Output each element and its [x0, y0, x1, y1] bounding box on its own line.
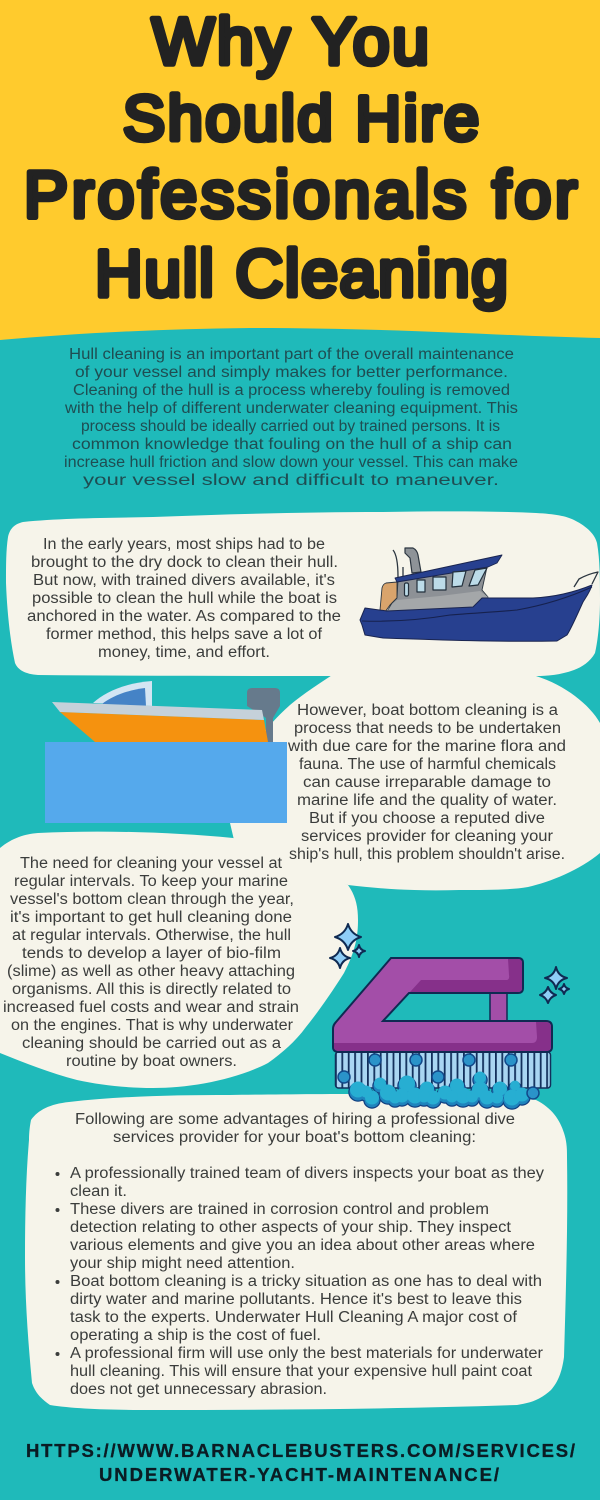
- foam shadow: [350, 1074, 529, 1108]
- list: advantages: dirty water and marine pollutants. Hence it's best to leave this: [70, 1291, 522, 1308]
- list: advantages: your ship might need attention.: [70, 1255, 295, 1272]
- title: Should Hire: [123, 84, 479, 154]
- text: regular intervals: routine by boat owners.: [66, 1053, 237, 1070]
- text: regular intervals: cleaning should be carried out as a: [22, 1035, 281, 1052]
- intro paragraph: process should be ideally carried out by trained persons. It is: [81, 418, 500, 435]
- text: early years: In the early years, most ships had to be: [43, 536, 325, 553]
- text: early years: possible to clean the hull while the boat is: [32, 590, 337, 607]
- brush post: [490, 990, 507, 1023]
- motor: [247, 688, 280, 742]
- windows: [404, 568, 487, 596]
- intro paragraph: with the help of different underwater cleaning equipment. This: [64, 400, 518, 417]
- foam outline: [350, 1074, 529, 1108]
- deck: [387, 591, 488, 612]
- icon: scrubbing brush: [333, 958, 552, 1108]
- text: regular intervals: at regular intervals. Otherwise, the hull: [12, 927, 291, 944]
- orange hull: [60, 712, 268, 742]
- source url: UNDERWATER-YACHT-MAINTENANCE/: [99, 1464, 499, 1485]
- text: regular intervals: vessel's bottom clean through the year,: [10, 891, 294, 908]
- text: boat bottom care: marine life and the quality of water.: [297, 792, 557, 809]
- list: advantages: does not get unnecessary abrasion.: [70, 1381, 327, 1398]
- funnel: [405, 548, 421, 573]
- text: regular intervals: on the engines. That is why underwater: [11, 1017, 293, 1034]
- panel: bubble 3 shape: [0, 832, 358, 1088]
- title: [24, 4, 577, 310]
- intro paragraph: common knowledge that fouling on the hull of a ship can: [72, 436, 512, 453]
- text: regular intervals: tends to develop a layer of bio-film: [22, 945, 281, 962]
- text: advantages intro: Following are some advantages of hiring a professional dive: [75, 1111, 515, 1128]
- text: boat bottom care: fauna. The use of harmful chemicals: [299, 756, 556, 773]
- text: early years: money, time, and effort.: [98, 644, 270, 661]
- title: Why You: [152, 4, 429, 78]
- windshield: [93, 681, 152, 706]
- list: advantages: A professionally trained team of divers inspects your boat as they: [70, 1165, 544, 1182]
- text: regular intervals: organisms. All this is directly related to: [12, 981, 291, 998]
- text: advantages intro: services provider for your boat's bottom cleaning:: [113, 1129, 476, 1146]
- text: boat bottom care: can cause irreparable damage to: [303, 774, 551, 791]
- list: advantages: clean it.: [70, 1183, 127, 1200]
- icon: sparkles left: [330, 924, 365, 968]
- cabin: [387, 567, 488, 612]
- list: advantages: hull cleaning. This will ensure that your expensive hull paint coat: [70, 1363, 533, 1380]
- panel: bubble 1 shape: [6, 511, 600, 676]
- text: early years: anchored in the water. As compared to the: [27, 608, 341, 625]
- intro paragraph: Hull cleaning is an important part of the overall maintenance: [69, 346, 514, 363]
- icon: sparkles right: [540, 967, 569, 1003]
- title: Professionals for: [24, 157, 577, 231]
- text: early years: [27, 536, 341, 661]
- intro paragraph: your vessel slow and difficult to maneuver.: [83, 472, 499, 489]
- icon: blue fishing boat: [360, 548, 598, 641]
- list: advantages: [56, 1165, 544, 1398]
- text: advantages intro: [75, 1111, 515, 1146]
- text: early years: former method, this helps save a lot of: [46, 626, 323, 643]
- blue water block: [45, 742, 287, 823]
- intro paragraph: of your vessel and simply makes for better performance.: [75, 364, 508, 381]
- bow rail: [574, 572, 598, 587]
- panel: advantages bubble: [25, 1094, 567, 1410]
- bristles: [336, 1052, 550, 1088]
- text: boat bottom care: process that needs to be undertaken: [294, 720, 561, 737]
- source url: [26, 1440, 575, 1485]
- gray band: [52, 702, 264, 720]
- list: advantages: A professional firm will use only the best materials for underwater: [70, 1345, 543, 1362]
- title: Hull Cleaning: [95, 236, 508, 310]
- hull line: [362, 587, 592, 621]
- roof: [395, 555, 502, 582]
- text: early years: brought to the dry dock to clean their hull.: [31, 554, 338, 571]
- source url: HTTPS://WWW.BARNACLEBUSTERS.COM/SERVICES/: [26, 1440, 575, 1461]
- text: regular intervals: The need for cleaning your vessel at: [20, 855, 283, 872]
- text: boat bottom care: However, boat bottom cleaning is a: [297, 702, 558, 719]
- text: regular intervals: [3, 855, 299, 1070]
- intro paragraph: [64, 346, 518, 489]
- list: advantages: Boat bottom cleaning is a tricky situation as one has to deal with: [70, 1273, 542, 1290]
- text: boat bottom care: But if you choose a reputed dive: [309, 810, 545, 827]
- bubbles: [338, 1054, 539, 1099]
- brush handle body: [333, 958, 552, 1052]
- list: advantages: operating a ship is the cost of fuel.: [70, 1327, 321, 1344]
- text: boat bottom care: services provider for cleaning your: [301, 828, 553, 845]
- intro paragraph: increase hull friction and slow down your vessel. This can make: [64, 454, 518, 471]
- handle shading: [334, 959, 551, 1051]
- text: boat bottom care: ship's hull, this problem shouldn't arise.: [289, 846, 565, 863]
- text: boat bottom care: [287, 702, 566, 863]
- foam highlight: [350, 1072, 529, 1106]
- text: early years: But now, with trained divers available, it's: [33, 572, 335, 589]
- list: advantages: detection relating to other aspects of your ship. They inspect: [70, 1219, 512, 1236]
- text: regular intervals: regular intervals. To keep your marine: [14, 873, 288, 890]
- text: regular intervals: increased fuel costs and wear and strain: [3, 999, 299, 1016]
- panel: bubble 2 shape: [229, 670, 600, 890]
- header band: yellow: [0, 0, 600, 340]
- masts: [393, 550, 403, 577]
- text: regular intervals: (slime) as well as other heavy attaching: [7, 963, 295, 980]
- text: regular intervals: it's important to get hull cleaning done: [10, 909, 292, 926]
- icon: speedboat: [52, 681, 280, 742]
- tan cabin back: [380, 582, 397, 612]
- list: advantages: various elements and give you an idea about other areas where: [70, 1237, 535, 1254]
- list: advantages: These divers are trained in corrosion control and problem: [70, 1201, 489, 1218]
- list: advantages: task to the experts. Underwater Hull Cleaning A major cost of: [70, 1309, 518, 1326]
- hull: [360, 585, 592, 641]
- text: boat bottom care: with due care for the marine flora and: [287, 738, 566, 755]
- intro paragraph: Cleaning of the hull is a process whereby fouling is removed: [73, 382, 510, 399]
